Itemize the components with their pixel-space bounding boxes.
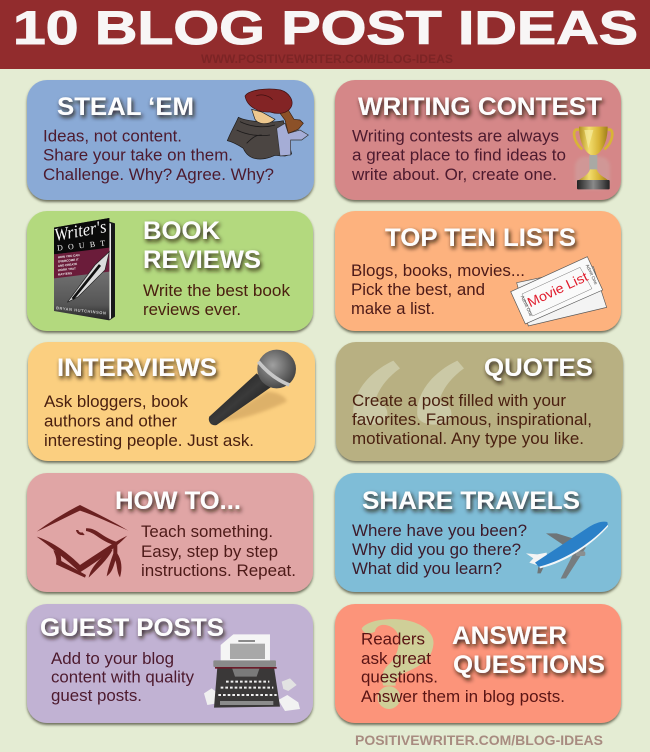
heading: book reviews <box>143 217 261 274</box>
icon: book cover <box>53 216 115 320</box>
heading: share travels: SHARE TRAVELS <box>362 487 580 515</box>
icon: book cover: AND CREATE <box>58 262 77 268</box>
heading: interviews: INTERVIEWS <box>57 354 217 382</box>
heading: how to: HOW TO... <box>115 487 241 515</box>
icon: movie tickets: Movie List <box>525 269 590 310</box>
panel: book reviews <box>27 211 313 331</box>
icon: book cover: OVERCOME IT <box>58 257 79 264</box>
panel: quotes <box>336 342 623 461</box>
panel: how to <box>27 473 313 592</box>
body: answer questions: Answer them in blog posts. <box>361 688 565 706</box>
body: top ten lists: make a list. <box>351 300 435 318</box>
heading: guest posts: GUEST POSTS <box>40 614 224 642</box>
body: answer questions: Readers <box>361 630 425 648</box>
body: quotes <box>352 392 592 448</box>
heading: writing contest: WRITING CONTEST <box>358 93 602 121</box>
header banner <box>0 0 650 69</box>
panel: steal 'em <box>27 80 314 200</box>
body: guest posts: content with quality <box>51 668 195 686</box>
icon: trophy <box>574 127 612 189</box>
body: interviews: interesting people. Just ask. <box>44 432 254 450</box>
icon: book cover: DOUBT <box>57 239 106 253</box>
body: interviews: authors and other <box>44 412 178 430</box>
body: quotes: favorites. Famous, inspirational, <box>352 411 592 429</box>
icon: graduation cap <box>37 505 128 578</box>
body: answer questions: questions. <box>361 668 438 686</box>
body: steal 'em: Ideas, not content. <box>43 128 182 146</box>
body: interviews <box>44 393 254 450</box>
body: share travels: What did you learn? <box>352 560 502 578</box>
body: how to: instructions. Repeat. <box>141 562 296 580</box>
body: interviews: Ask bloggers, book <box>44 393 189 411</box>
panel: interviews <box>28 342 315 461</box>
panel: guest posts <box>27 604 313 723</box>
body: writing contest: write about. Or, create one. <box>351 166 557 184</box>
panel: share travels <box>335 473 621 592</box>
panel: top ten lists <box>335 211 621 331</box>
icon: airplane <box>526 522 608 579</box>
body: how to: Teach something. <box>141 523 273 541</box>
heading: answer questions: QUESTIONS <box>453 651 605 679</box>
icon: microphone <box>209 350 296 425</box>
footer url: POSITIVEWRITER.COM/BLOG-IDEAS <box>355 733 603 748</box>
icon: hat-tipping figure <box>227 89 308 159</box>
body: top ten lists <box>351 262 525 318</box>
subtitle url: WWW.POSITIVEWRITER.COM/BLOG-IDEAS <box>201 52 453 66</box>
body: steal 'em <box>43 128 274 184</box>
body: writing contest: a great place to find ideas to <box>352 147 566 165</box>
icon: quotation marks <box>353 361 464 425</box>
icon: book cover: BRYAN HUTCHINSON <box>56 305 106 316</box>
heading: answer questions <box>452 622 605 679</box>
heading: book reviews: BOOK <box>143 217 220 245</box>
body: guest posts: Add to your blog <box>51 650 174 668</box>
body: how to: Easy, step by step <box>141 543 278 561</box>
icon: question mark <box>362 619 434 709</box>
body: share travels <box>352 522 527 578</box>
heading: steal 'em: STEAL ‘EM <box>57 93 194 121</box>
body: guest posts: guest posts. <box>51 687 142 705</box>
body: guest posts <box>51 650 195 705</box>
icon: book cover: Writer's <box>53 216 108 245</box>
title: 10 BLOG POST IDEAS <box>13 1 638 54</box>
body: book reviews <box>143 282 291 319</box>
body: steal 'em: Challenge. Why? Agree. Why? <box>43 166 274 184</box>
body: how to <box>141 523 296 580</box>
heading: top ten lists: TOP TEN LISTS <box>385 224 576 252</box>
body: steal 'em: Share your take on them. <box>43 147 233 165</box>
body: book reviews: reviews ever. <box>143 301 241 319</box>
icon: book cover: WORK THAT <box>58 266 76 272</box>
body: share travels: Why did you go there? <box>352 541 521 559</box>
icon: movie tickets <box>511 257 607 326</box>
body: answer questions: ask great <box>361 650 431 668</box>
icon: book cover: MATTERS <box>58 271 72 277</box>
body: writing contest: Writing contests are always <box>352 128 559 146</box>
body: answer questions <box>361 630 565 706</box>
heading: quotes: QUOTES <box>484 354 593 382</box>
heading: answer questions: ANSWER <box>452 622 567 650</box>
panel: writing contest <box>335 80 621 200</box>
body: quotes: Create a post filled with your <box>352 392 567 410</box>
icon: book cover: HOW YOU CAN <box>58 253 80 259</box>
heading: book reviews: REVIEWS <box>143 246 261 274</box>
panel: answer questions <box>335 604 621 723</box>
body: book reviews: Write the best book <box>143 282 291 300</box>
icon: movie tickets: Admit One <box>520 295 534 317</box>
body: top ten lists: Blogs, books, movies... <box>351 262 525 280</box>
body: writing contest <box>351 128 566 184</box>
body: quotes: motivational. Any type you like. <box>352 430 584 448</box>
body: top ten lists: Pick the best, and <box>351 281 485 299</box>
body: share travels: Where have you been? <box>352 522 527 540</box>
icon: typewriter <box>204 634 300 711</box>
icon: movie tickets: Admit One <box>585 263 599 286</box>
